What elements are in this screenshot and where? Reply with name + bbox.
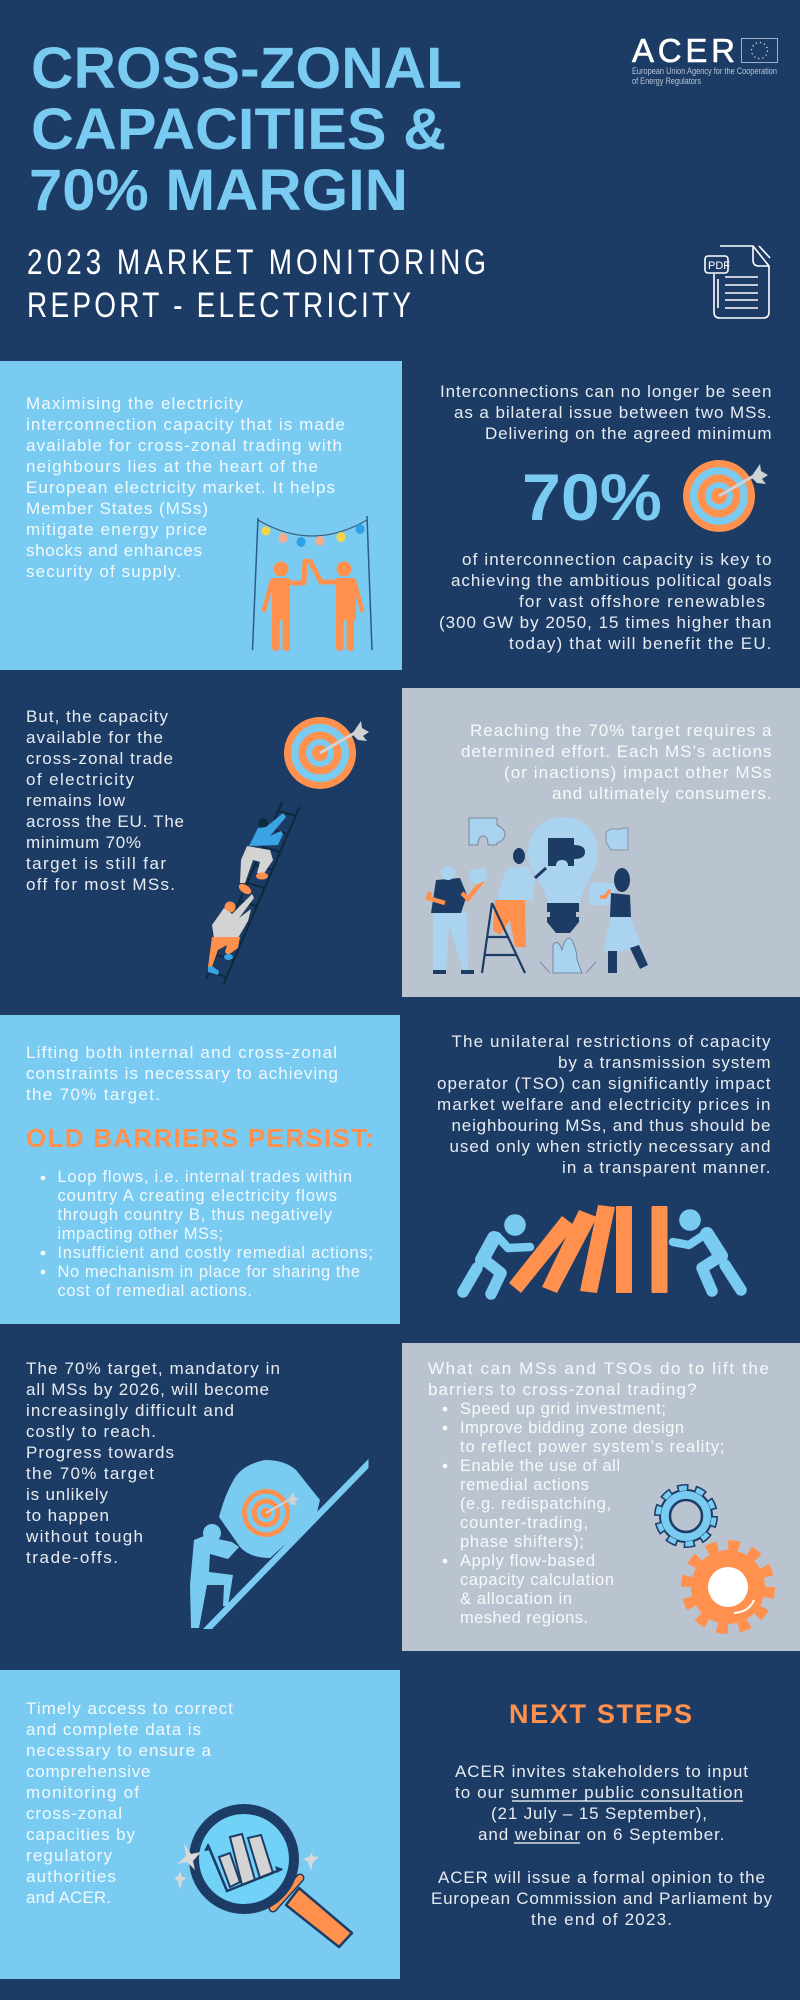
panel: lifting constraints bbox=[0, 1015, 400, 1324]
text: capacity remains low: of electricity bbox=[26, 770, 134, 789]
text: question bbox=[428, 1359, 769, 1399]
icon: PDF document: PDF bbox=[708, 260, 730, 272]
title: 70% MARGIN bbox=[29, 158, 408, 223]
text: capacity remains low: cross-zonal trade bbox=[26, 749, 173, 768]
text: ACER invites stakeholders bbox=[455, 1762, 748, 1844]
text: maximising capacity: neighbours lies at the heart of the bbox=[26, 457, 318, 476]
icon: person pushing boulder up slope bbox=[190, 1459, 368, 1629]
icon: target above ladder bbox=[284, 717, 369, 789]
icon: orange gear bbox=[686, 1545, 770, 1629]
list: actions: Enable the use of all bbox=[460, 1457, 620, 1475]
title bbox=[29, 36, 462, 223]
text: determined effort: and ultimately consumers. bbox=[552, 784, 772, 803]
list: barriers: country A creating electricity flows bbox=[58, 1187, 337, 1205]
title: CROSS-ZONAL bbox=[31, 36, 462, 101]
list: barriers: through country B, thus negatively bbox=[58, 1206, 333, 1224]
text: 70% target mandatory: increasingly difficult and bbox=[26, 1401, 234, 1420]
text: timely access: necessary to ensure a bbox=[26, 1741, 212, 1760]
title: CAPACITIES & bbox=[31, 97, 446, 162]
text: capacity remains low: remains low bbox=[26, 791, 126, 810]
logo: ACER: of Energy Regulators bbox=[632, 76, 701, 87]
icon: blue gear bbox=[658, 1488, 714, 1544]
icon: PDF document bbox=[705, 246, 770, 318]
text: capacity remains low: off for most MSs. bbox=[26, 875, 175, 894]
text: interconnections intro: Delivering on the agreed minimum bbox=[485, 424, 772, 443]
text: timely access: monitoring of bbox=[26, 1783, 139, 1802]
list: actions: counter-trading, bbox=[460, 1514, 588, 1532]
text: maximising capacity: available for cross-zonal trading with bbox=[26, 436, 342, 455]
icon: magnifying glass over bar chart bbox=[174, 1809, 352, 1947]
list: actions: phase shifters); bbox=[460, 1533, 584, 1551]
text: capacity remains low: But, the capacity bbox=[26, 707, 168, 726]
icon: people and falling dominoes bbox=[463, 1205, 741, 1294]
text: unilateral restrictions: neighbouring MSs, and thus should be bbox=[452, 1116, 770, 1135]
heading: next steps: NEXT STEPS bbox=[509, 1699, 692, 1729]
list: barriers: No mechanism in place for sharing the bbox=[58, 1263, 360, 1281]
text: determined effort bbox=[461, 721, 772, 803]
text: interconnections intro bbox=[440, 382, 772, 443]
text: capacity remains low: minimum 70% bbox=[26, 833, 141, 852]
text: timely access: capacities by bbox=[26, 1825, 136, 1844]
list: actions: to reflect power system’s reality; bbox=[460, 1438, 724, 1456]
text: maximising capacity: security of supply. bbox=[26, 562, 181, 581]
logo: ACER: ACER bbox=[632, 32, 735, 69]
text: interconnection capacity goals: (300 GW by 2050, 15 times higher than bbox=[439, 613, 772, 632]
text: interconnection capacity goals: today) that will benefit the EU. bbox=[509, 634, 772, 653]
icon: climbers on ladder bbox=[206, 802, 300, 984]
text: ACER formal opinion: European Commission and Parliament by bbox=[431, 1889, 772, 1908]
text: lifting constraints intro: the 70% target. bbox=[26, 1085, 160, 1104]
text: unilateral restrictions: by a transmission system bbox=[558, 1053, 770, 1072]
text: unilateral restrictions bbox=[437, 1032, 771, 1177]
text: ACER invites stakeholders: (21 July – 15 September), bbox=[491, 1804, 707, 1823]
text: maximising capacity: interconnection capacity that is made bbox=[26, 415, 345, 434]
text: 70% target mandatory: Progress towards bbox=[26, 1443, 174, 1462]
text: maximising capacity: mitigate energy price bbox=[26, 520, 207, 539]
panel: maximising interconnection capacity bbox=[0, 361, 402, 670]
text: 70% target mandatory: The 70% target, mandatory in bbox=[26, 1359, 280, 1378]
text: determined effort: determined effort. Each MS’s actions bbox=[461, 742, 772, 761]
text: 70% target mandatory bbox=[25, 1359, 280, 1567]
text: timely access: and complete data is bbox=[26, 1720, 201, 1739]
text: question: What can MSs and TSOs do to lift the bbox=[428, 1359, 769, 1378]
big number: 70%: 70% bbox=[522, 460, 662, 534]
text: maximising capacity: Member States (MSs) bbox=[26, 499, 208, 518]
logo: ACER bbox=[632, 32, 778, 87]
text: maximising capacity: shocks and enhances bbox=[26, 541, 202, 560]
list: actions: (e.g. redispatching, bbox=[460, 1495, 611, 1513]
subtitle: 2023 MARKET MONITORING bbox=[27, 242, 486, 282]
text: interconnection capacity goals: for vast offshore renewables bbox=[519, 592, 765, 611]
list: actions: meshed regions. bbox=[460, 1609, 588, 1627]
subtitle: REPORT - ELECTRICITY bbox=[27, 285, 411, 325]
text: unilateral restrictions: used only when strictly necessary and bbox=[450, 1137, 770, 1156]
text: 70% target mandatory: without tough bbox=[25, 1527, 143, 1546]
text: 70% target mandatory: the 70% target bbox=[26, 1464, 154, 1483]
list: barriers: impacting other MSs; bbox=[58, 1225, 223, 1243]
text: lifting constraints intro bbox=[26, 1043, 338, 1104]
text: 70% target mandatory: all MSs by 2026, will become bbox=[26, 1380, 269, 1399]
text: maximising capacity: European electricity market. It helps bbox=[26, 478, 335, 497]
text: ACER formal opinion bbox=[431, 1868, 772, 1929]
text: determined effort: Reaching the 70% target requires a bbox=[470, 721, 772, 740]
list: actions: capacity calculation bbox=[460, 1571, 614, 1589]
text: capacity remains low: target is still far bbox=[26, 854, 166, 873]
text: timely access: Timely access to correct bbox=[26, 1699, 233, 1718]
text: ACER invites stakeholders: to our summer public consultation bbox=[455, 1783, 743, 1802]
text: unilateral restrictions: The unilateral restrictions of capacity bbox=[452, 1032, 771, 1051]
text: timely access: regulatory bbox=[26, 1846, 112, 1865]
list: barriers: Loop flows, i.e. internal trades within bbox=[58, 1168, 352, 1186]
text: 70% target mandatory: costly to reach. bbox=[26, 1422, 156, 1441]
text: timely access: cross-zonal bbox=[26, 1804, 122, 1823]
subtitle bbox=[27, 242, 486, 325]
text: capacity remains low: across the EU. The bbox=[26, 812, 184, 831]
text: timely access bbox=[26, 1699, 233, 1907]
panel: what MSs and TSOs can do bbox=[402, 1343, 800, 1651]
icon: people building a puzzle light bulb bbox=[428, 817, 648, 974]
list: barriers bbox=[41, 1168, 373, 1300]
panel: reaching the 70% target bbox=[402, 688, 800, 997]
text: lifting constraints intro: Lifting both internal and cross-zonal bbox=[26, 1043, 337, 1062]
list: actions: Speed up grid investment; bbox=[460, 1400, 666, 1418]
text: timely access: authorities bbox=[26, 1867, 116, 1886]
text: interconnections intro: as a bilateral issue between two MSs. bbox=[454, 403, 772, 422]
text: timely access: comprehensive bbox=[26, 1762, 150, 1781]
list: actions bbox=[443, 1400, 724, 1627]
text: unilateral restrictions: market welfare and electricity prices in bbox=[437, 1095, 770, 1114]
text: interconnection capacity goals: of interconnection capacity is key to bbox=[462, 550, 772, 569]
list: actions: & allocation in bbox=[460, 1590, 572, 1608]
icon: target bbox=[683, 460, 768, 532]
text: unilateral restrictions: in a transparent manner. bbox=[562, 1158, 770, 1177]
text: maximising capacity: Maximising the electricity bbox=[26, 394, 244, 413]
text: 70% target mandatory: to happen bbox=[26, 1506, 109, 1525]
list: actions: remedial actions bbox=[460, 1476, 589, 1494]
list: actions: Apply flow-based bbox=[460, 1552, 595, 1570]
text: determined effort: (or inactions) impact other MSs bbox=[504, 763, 772, 782]
text: maximising capacity bbox=[26, 394, 345, 581]
text: 70% target mandatory: trade-offs. bbox=[26, 1548, 118, 1567]
text: interconnection capacity goals: achieving the ambitious political goals bbox=[451, 571, 772, 590]
text: timely access: and ACER. bbox=[26, 1888, 111, 1907]
text: ACER invites stakeholders: and webinar on 6 September. bbox=[478, 1825, 724, 1844]
text: interconnection capacity goals bbox=[439, 550, 772, 653]
heading: old barriers persist: OLD BARRIERS PERSIST: bbox=[26, 1123, 374, 1153]
text: ACER formal opinion: the end of 2023. bbox=[531, 1910, 672, 1929]
list: barriers: Insufficient and costly remedial actions; bbox=[58, 1244, 373, 1262]
text: interconnections intro: Interconnections can no longer be seen bbox=[440, 382, 772, 401]
list: actions: Improve bidding zone design bbox=[460, 1419, 684, 1437]
panel: timely access to data bbox=[0, 1670, 400, 1979]
text: ACER formal opinion: ACER will issue a formal opinion to the bbox=[438, 1868, 765, 1887]
text: 70% target mandatory: is unlikely bbox=[26, 1485, 108, 1504]
text: capacity remains low bbox=[26, 707, 184, 894]
text: lifting constraints intro: constraints is necessary to achieving bbox=[26, 1064, 338, 1083]
text: question: barriers to cross-zonal trading? bbox=[428, 1380, 696, 1399]
icon: high five under lights bbox=[252, 516, 372, 651]
text: ACER invites stakeholders: ACER invites stakeholders to input bbox=[455, 1762, 748, 1781]
text: unilateral restrictions: operator (TSO) can significantly impact bbox=[437, 1074, 771, 1093]
list: barriers: cost of remedial actions. bbox=[58, 1282, 252, 1300]
text: capacity remains low: available for the bbox=[26, 728, 163, 747]
